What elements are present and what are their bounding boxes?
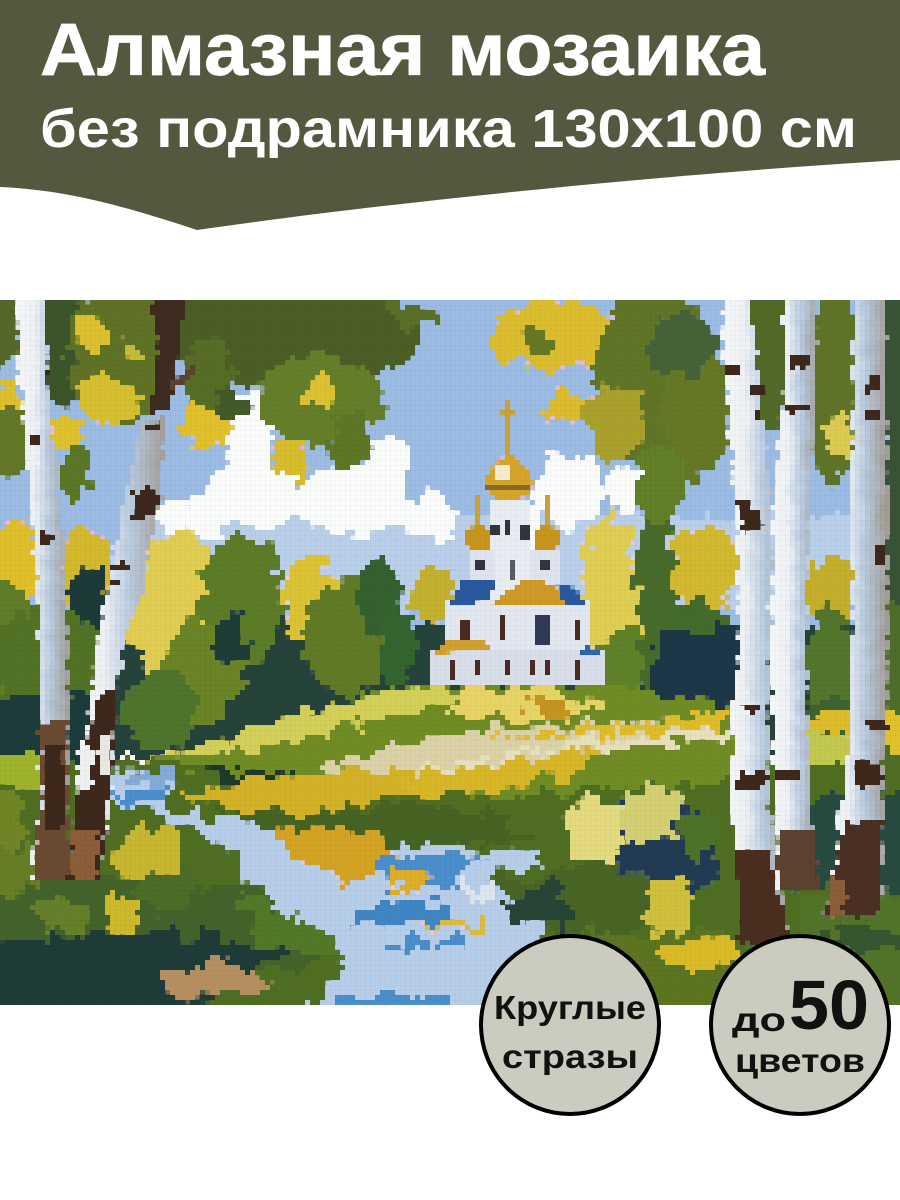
badge: up to 50 colours — [711, 936, 889, 1114]
landscape foliage and meadow — [0, 300, 900, 1005]
sky — [0, 300, 890, 630]
badge: round rhinestones — [481, 936, 659, 1114]
church — [432, 400, 607, 686]
church domes — [485, 452, 533, 500]
river — [110, 765, 545, 1005]
birch trunks — [15, 270, 888, 945]
clouds — [150, 392, 643, 541]
birch trunk left — [15, 270, 70, 880]
badge text line 1: Круглые — [494, 989, 646, 1026]
painting: church among birches — [0, 300, 900, 1005]
birch trunk right A — [720, 270, 790, 945]
meadow — [0, 685, 900, 1005]
badge text: colours: цветов — [735, 1042, 865, 1079]
birch trunk right C — [825, 270, 888, 915]
church roofs — [448, 582, 495, 608]
birch trunk second with branches — [68, 420, 167, 880]
birch bark marks — [30, 355, 886, 945]
header banner — [0, 0, 900, 230]
subtitle: без подрамника 130х100 см — [40, 99, 857, 159]
church windows — [491, 523, 499, 535]
title: Алмазная мозаика — [40, 8, 766, 91]
foreground left bushes and bank — [0, 820, 575, 1005]
badge text: up to: до — [732, 1001, 786, 1038]
mosaic texture — [0, 300, 900, 1005]
church main body — [490, 498, 530, 598]
upper canopy foliage — [0, 245, 900, 760]
church crosses — [505, 400, 510, 458]
birch trunk right B — [770, 270, 820, 890]
badge number 50: 50 — [789, 966, 869, 1044]
distant tree line — [0, 506, 855, 765]
badge text line 2: стразы — [502, 1038, 638, 1075]
